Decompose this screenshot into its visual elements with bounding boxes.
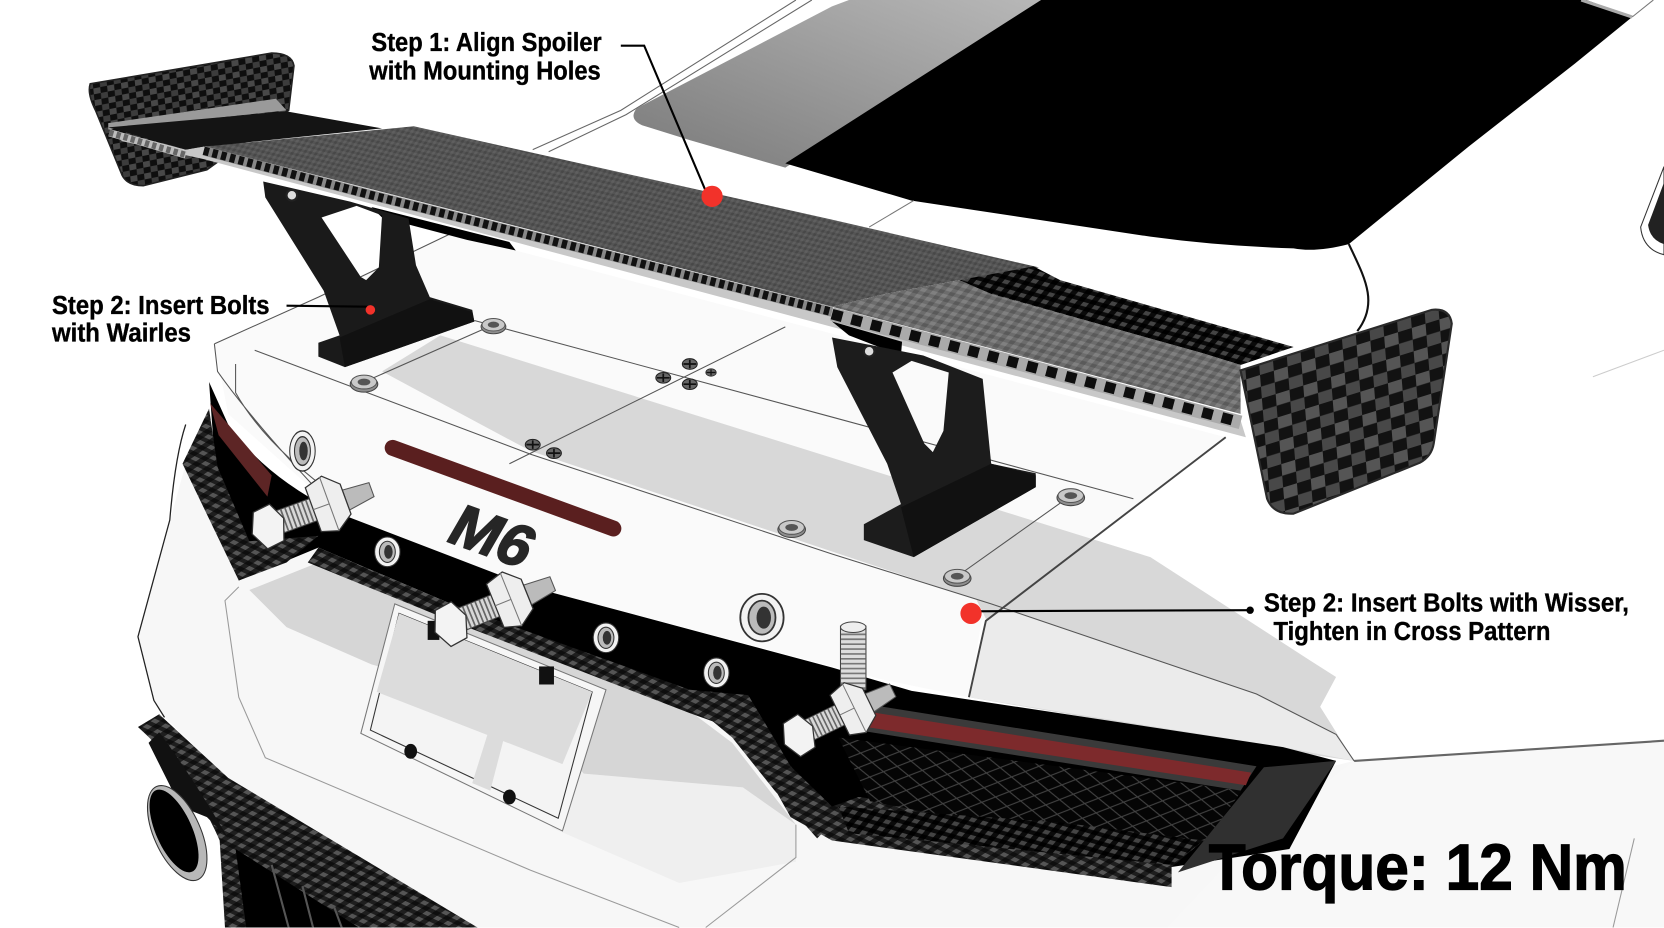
callout: step 1: with Mounting Holes (368, 58, 601, 86)
black band (209, 382, 1336, 867)
torque label: Torque: 12 Nm (1209, 830, 1627, 903)
exhaust tip (135, 777, 219, 889)
left end plate (89, 53, 294, 186)
left carbon (183, 409, 318, 580)
trunk lid (214, 233, 1354, 761)
badge: M6: M6 (437, 493, 549, 580)
body shadow under lip (249, 562, 796, 825)
right upright (832, 337, 1036, 557)
leader line (974, 610, 1250, 611)
plate tabs (428, 621, 439, 640)
diffuser frame (225, 834, 478, 928)
callout: step 2 right (960, 589, 1629, 646)
carbon floor (838, 807, 1203, 865)
dark weave section (959, 266, 1294, 365)
left upright (263, 181, 474, 367)
left tail light (210, 403, 272, 497)
side window fragment (1641, 167, 1664, 255)
rear carbon lip and black trim (183, 382, 1336, 887)
rear window (533, 0, 1664, 377)
deck shadow (382, 335, 1354, 761)
deck line (869, 201, 914, 227)
trunk seam line (1349, 244, 1368, 331)
callout: step 2 right: Step 2: Insert Bolts with Wisser, (1264, 589, 1629, 617)
right tail frame (1178, 761, 1336, 872)
window rim lines (533, 0, 812, 152)
carbon lower band (308, 548, 1203, 887)
callout: step 1 (368, 29, 723, 207)
leader line (621, 46, 706, 191)
deck mounting hardware (350, 319, 1085, 586)
body crease (1354, 741, 1664, 761)
glass black section (785, 0, 1632, 250)
vertical stud (840, 626, 866, 690)
main wing surface (204, 126, 1039, 307)
plate screws (404, 744, 417, 759)
mid-tone weave section (832, 280, 1241, 414)
red marker (960, 603, 982, 624)
leading edge strip: center (204, 151, 832, 312)
leading edge strip: left tip (109, 133, 186, 155)
red marker (701, 186, 723, 207)
license plate (361, 604, 606, 831)
callout: step 1: Step 1: Align Spoiler (371, 29, 602, 57)
deck seam (969, 437, 1226, 697)
fin highlight (108, 99, 287, 129)
rings on tail panel (290, 431, 784, 688)
shadow under wing (371, 207, 516, 250)
leading edge strip: right (832, 314, 1241, 422)
silver underside of wing (109, 129, 1246, 437)
center brake light (393, 448, 613, 528)
exhaust and diffuser (135, 714, 478, 928)
callout: step 2 left: Step 2: Insert Bolts (52, 292, 270, 320)
right end plate (1241, 310, 1452, 514)
glass grey section (634, 0, 1045, 168)
leader line (287, 306, 367, 307)
car body: rear bumper (138, 424, 1664, 928)
pale lower shading (531, 711, 796, 883)
panel lines (214, 233, 1354, 761)
callout: step 2 right: Tighten in Cross Pattern (1273, 618, 1550, 646)
callout: step 2 left (51, 292, 375, 348)
callout: step 2 left: with Wairles (51, 320, 191, 348)
bolt link lines (364, 325, 1071, 576)
red marker (366, 305, 375, 315)
bolts with nuts (242, 462, 904, 767)
spoiler wing (89, 53, 1452, 557)
license recess outline (225, 587, 796, 928)
mesh grille (838, 738, 1242, 844)
red tail bar (864, 706, 1256, 791)
glossy black surface (108, 111, 382, 150)
